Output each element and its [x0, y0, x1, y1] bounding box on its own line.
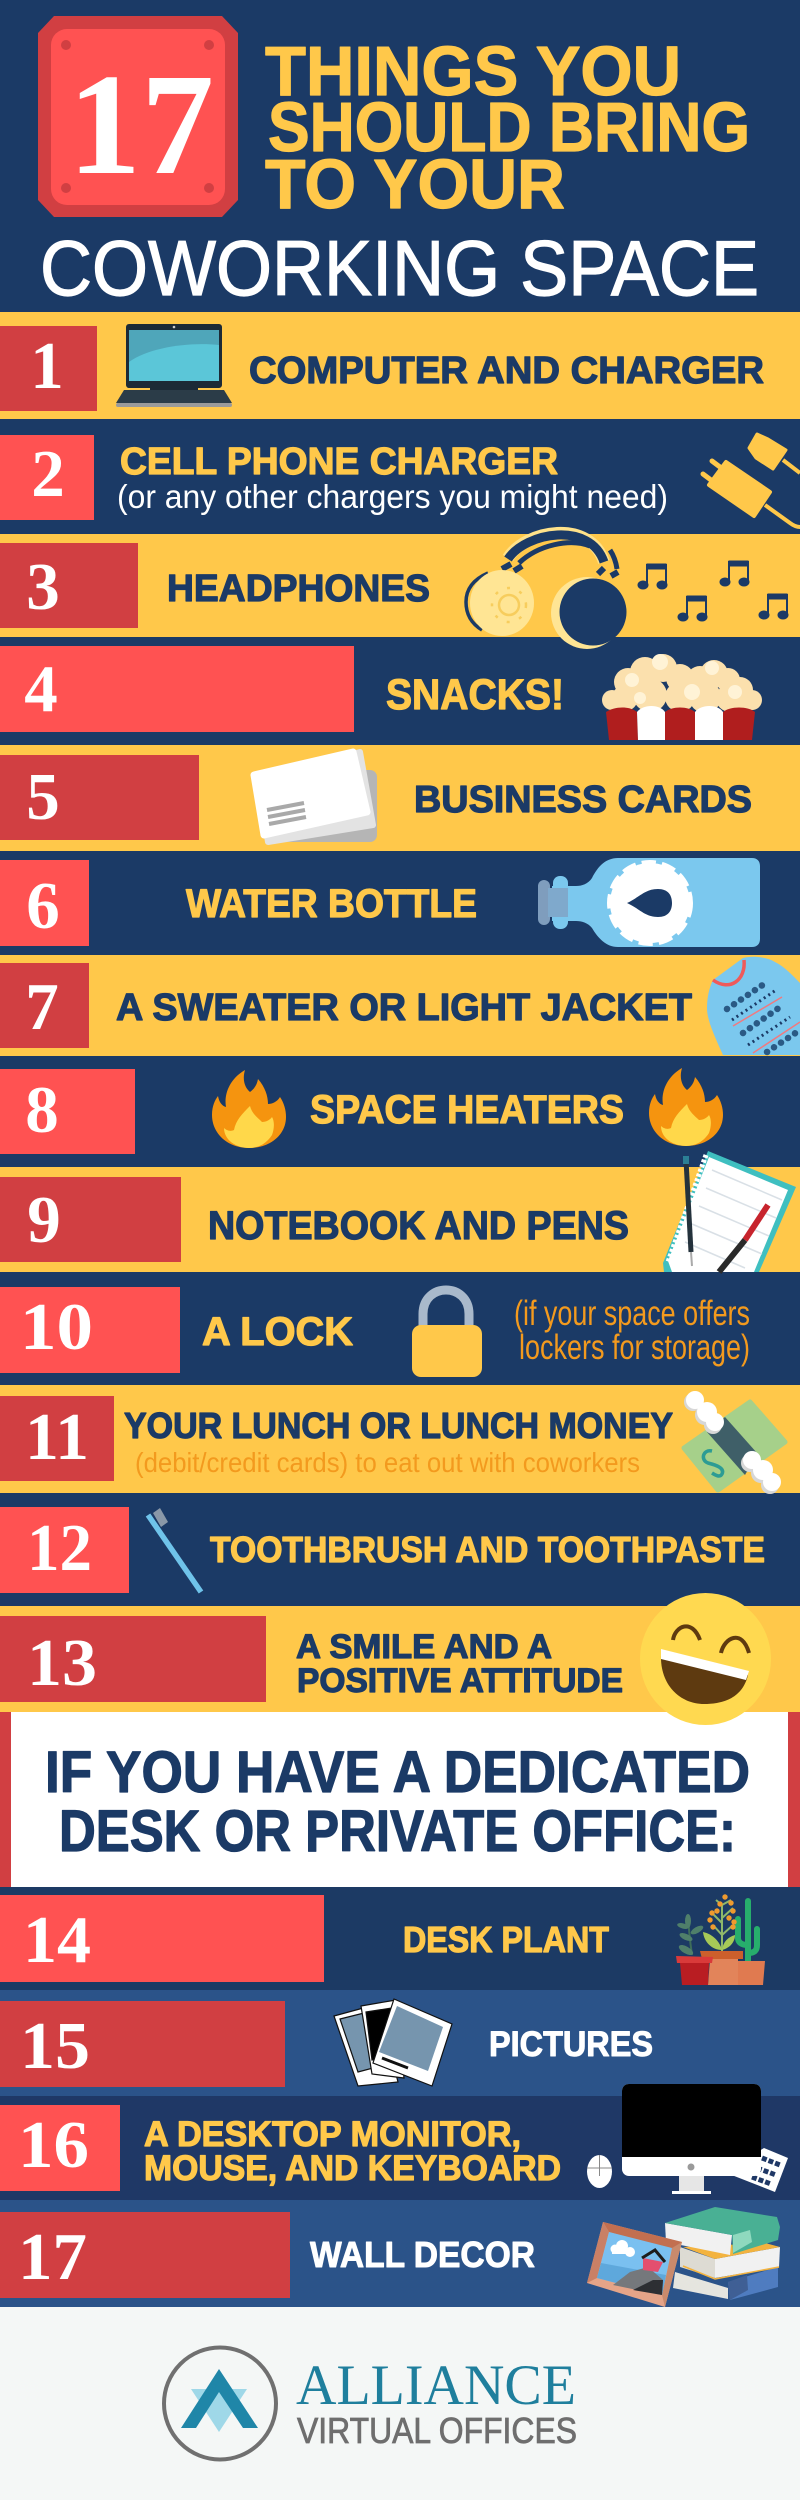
- label: SNACKS!: [386, 671, 564, 719]
- row 7: sweater: [0, 955, 800, 1056]
- callout line 1: IF YOU HAVE A DEDICATED: [45, 1740, 750, 1805]
- icon: chargers: [703, 434, 800, 527]
- icon: monitor: [622, 2084, 761, 2194]
- icon: mouse: [587, 2155, 612, 2188]
- row 12: toothbrush: [0, 1507, 765, 1593]
- icon: laughing smiley: [640, 1593, 771, 1725]
- sublabel: (debit/credit cards) to eat out with coworkers: [135, 1447, 640, 1478]
- icon: toothbrush: [148, 1508, 201, 1592]
- title line 4: COWORKING SPACE: [40, 224, 759, 312]
- label line 2: POSITIVE ATTITUDE: [297, 1662, 623, 1700]
- row 8: space heaters: [0, 1068, 723, 1154]
- title line 3: TO YOUR: [265, 145, 565, 223]
- label: NOTEBOOK AND PENS: [208, 1204, 629, 1248]
- row 10: a lock: 10: [20, 1290, 93, 1364]
- icon: sweater: [707, 957, 800, 1055]
- logo: alliance wordmark: ALLIANCE: [296, 2354, 576, 2417]
- logo: virtual offices: VIRTUAL OFFICES: [297, 2410, 577, 2451]
- row 7: sweater: 7: [25, 970, 59, 1044]
- row 13: smile: [0, 1606, 800, 1713]
- row 10: a lock: [0, 1287, 750, 1377]
- row 6: water bottle: [0, 858, 760, 947]
- row 14: desk plant: [0, 1887, 800, 1990]
- row 9: notebook and pens: [0, 1151, 800, 1272]
- row 15: pictures: [0, 1990, 800, 2096]
- label: TOOTHBRUSH AND TOOTHPASTE: [210, 1529, 765, 1570]
- badge: 17: 17: [68, 45, 214, 205]
- row 1: computer and charger: 1: [30, 329, 64, 403]
- label: BUSINESS CARDS: [414, 779, 752, 821]
- icon: keyboard: [724, 2148, 788, 2192]
- callout: dedicated desk: [0, 1712, 800, 1887]
- row 8: space heaters: 8: [25, 1073, 59, 1147]
- row 9: notebook and pens: 9: [27, 1183, 61, 1257]
- icon: laptop: [116, 324, 232, 407]
- row 2: cell phone charger: 2: [31, 437, 65, 511]
- row 17: wall decor: [0, 2200, 800, 2307]
- row 2: cell phone charger: [0, 434, 800, 527]
- icon: photos: [334, 1999, 452, 2086]
- row 5: business cards: 5: [26, 760, 60, 834]
- label: YOUR LUNCH OR LUNCH MONEY: [124, 1405, 673, 1446]
- label line 2: MOUSE, AND KEYBOARD: [144, 2149, 561, 2188]
- label: A LOCK: [202, 1310, 353, 1354]
- label: WATER BOTTLE: [186, 882, 477, 926]
- row 15: pictures: 15: [20, 2009, 90, 2083]
- row 11: lunch money: [0, 1385, 800, 1494]
- row 13: smile: 13: [27, 1626, 97, 1700]
- label: COMPUTER AND CHARGER: [249, 350, 764, 392]
- label: CELL PHONE CHARGER: [120, 441, 558, 483]
- row 3: headphones: 3: [26, 550, 60, 624]
- row 6: water bottle: 6: [26, 869, 60, 943]
- label: A SWEATER OR LIGHT JACKET: [116, 987, 692, 1029]
- row 4: snacks: 4: [24, 652, 58, 726]
- row 11: lunch money: 11: [25, 1400, 89, 1474]
- label line 1: A DESKTOP MONITOR,: [144, 2115, 521, 2154]
- footer: [0, 2307, 800, 2500]
- icon: framed picture: [587, 2222, 682, 2307]
- label line 1: A SMILE AND A: [296, 1628, 552, 1666]
- row 4: snacks: [0, 646, 762, 740]
- icon: books: [665, 2207, 780, 2300]
- title line 2: SHOULD BRING: [268, 88, 750, 166]
- row 16: desktop monitor: 16: [18, 2108, 89, 2182]
- row 17: wall decor: 17: [18, 2220, 87, 2294]
- label: PICTURES: [489, 2025, 653, 2064]
- badge: 17: [38, 16, 238, 217]
- icon: popcorn: [602, 654, 762, 740]
- icon: notebook and pens: [663, 1151, 796, 1272]
- row 16: desktop monitor: [0, 2084, 800, 2200]
- row 12: toothbrush: 12: [27, 1511, 92, 1585]
- icon: flame right: [649, 1068, 723, 1146]
- icon: lock: [412, 1290, 482, 1377]
- header: [38, 16, 759, 312]
- sublabel: (or any other chargers you might need): [117, 478, 668, 515]
- icon: business cards: [254, 752, 377, 842]
- label: WALL DECOR: [310, 2234, 535, 2275]
- icon: music notes: [638, 561, 788, 621]
- icon: flying money: [684, 1391, 785, 1494]
- title line 1: THINGS YOU: [265, 32, 681, 110]
- row 5: business cards: [0, 745, 800, 851]
- icon: water bottle: [538, 858, 760, 947]
- label: HEADPHONES: [167, 568, 430, 610]
- row 1: computer and charger: [0, 312, 800, 419]
- row 3: headphones: [0, 533, 800, 649]
- label: DESK PLANT: [403, 1919, 609, 1960]
- icon: headphones: [466, 533, 626, 649]
- row 14: desk plant: 14: [23, 1903, 91, 1977]
- logo: alliance mark: [164, 2348, 276, 2460]
- label: SPACE HEATERS: [310, 1088, 624, 1132]
- icon: flame left: [212, 1070, 286, 1148]
- icon: desk plants: [676, 1894, 765, 1985]
